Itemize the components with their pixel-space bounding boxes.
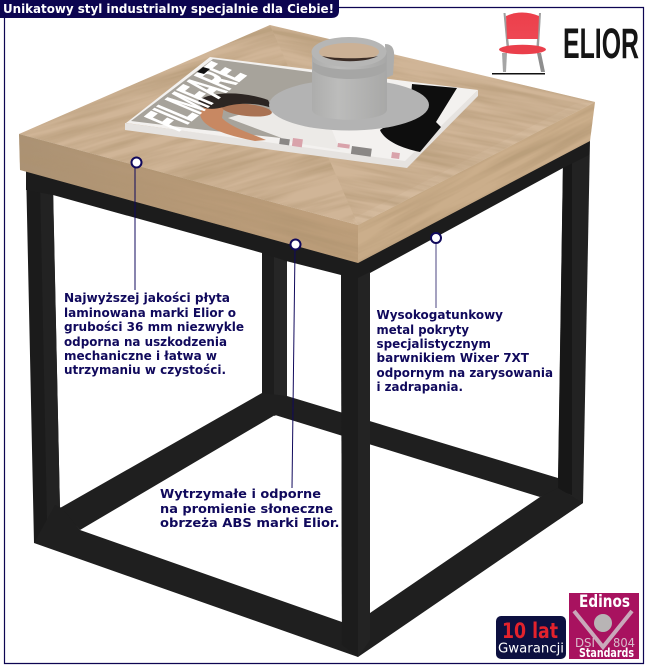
badge: 10 year warranty: Gwarancji [498,642,564,656]
callout text: obrzeża ABS marki Elior. [160,516,340,530]
cover [126,57,478,161]
shirt [228,108,340,150]
back bottom rails [60,393,558,530]
wooden table top [19,25,595,263]
callout text: i zadrapania. [376,380,463,394]
plate [269,80,429,130]
bevel highlight [352,102,595,225]
callout text: utrzymaniu w czystości. [64,363,226,377]
callout text: specjalistycznym [376,337,491,351]
callout text [160,487,340,530]
callout: metal coating [376,233,553,394]
callout: laminated board [64,158,244,377]
top rails [26,135,590,282]
callout text: mechaniczne i łatwa w [64,349,217,363]
badge: Edinos standards: 804 [613,635,635,650]
badge: Edinos standards: Edinos [579,592,630,612]
badge: 10 year warranty [496,616,566,659]
grey cover photo [131,59,345,140]
callout text: Najwyższej jakości płyta [64,291,230,305]
magazine title: FILMFARE [132,56,258,137]
pages [125,90,478,168]
callout text: odporna na uszkodzenia [64,335,227,349]
icon: red chair logo [492,12,546,74]
callout text: na promienie słoneczne [160,502,333,516]
front leg [341,270,370,657]
pink details [292,138,400,159]
right leg [558,140,590,520]
left edge [19,134,358,263]
callout text: grubości 36 mm niezwykle [64,320,244,334]
black shape [380,84,457,152]
rim [312,37,386,67]
bottom front rails [34,488,583,657]
badge: Edinos standards: Standards [579,646,634,660]
badge: Edinos standards: DSI [575,635,595,650]
callout text: odpornym na zarysowania [376,366,553,380]
header banner [0,0,339,18]
magazine [125,56,478,168]
ribbed band [313,62,386,79]
cup body [312,52,387,120]
metal table frame [26,135,590,657]
wood grain [19,25,595,263]
badge: Edinos standards [569,592,639,660]
top face [19,25,595,225]
handle [385,44,394,78]
callout text: barwnikiem Wixer 7XT [376,351,530,365]
callout text: laminowana marki Elior o [64,306,236,320]
left leg [26,168,70,543]
callout: ABS edges [160,240,340,530]
face [222,101,272,119]
small black logo [197,67,210,74]
hair [197,93,272,109]
callout text [376,308,553,394]
badge: 10 year warranty: 10 lat [502,619,558,643]
callout text: metal pokryty [376,323,469,337]
callout text: Wytrzymałe i odporne [160,487,321,501]
header text: Unikatowy styl industrialny specjalnie dla Ciebie! [3,2,334,16]
callout text [64,291,244,377]
right edge [358,102,595,263]
arm [200,105,266,141]
back leg [262,245,287,416]
coffee [319,43,379,61]
coffee cup [312,37,394,120]
callout text: Wysokogatunkowy [376,308,503,322]
